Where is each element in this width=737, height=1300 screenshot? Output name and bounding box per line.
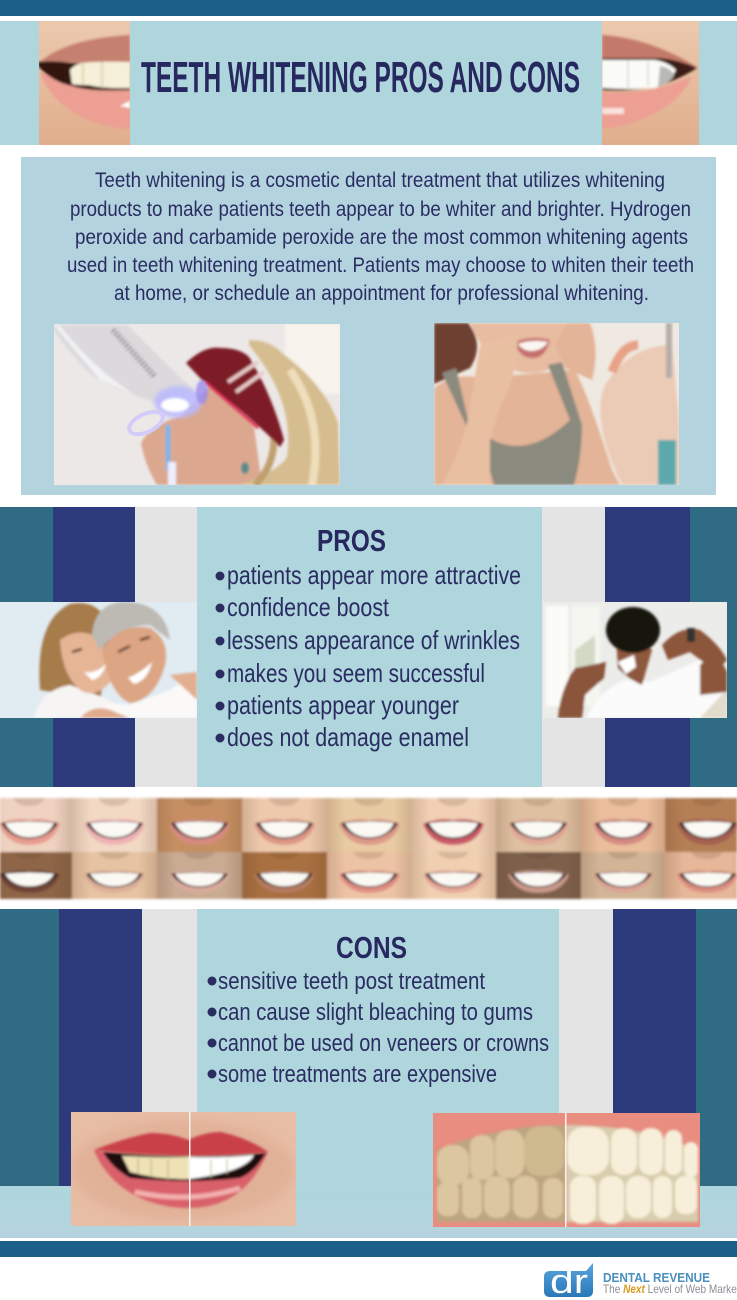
pros list: lessens appearance of wrinkles — [227, 625, 520, 655]
pros list — [216, 560, 521, 752]
cons list: some treatments are expensive — [218, 1061, 497, 1088]
pros heading: PROS — [317, 523, 386, 558]
pros list: makes you seem successful — [227, 658, 485, 688]
panel: cons — [0, 909, 737, 1238]
row 2 of smiles — [0, 852, 737, 899]
pros list: does not damage enamel — [227, 722, 469, 752]
intro text: Teeth whitening is a cosmetic dental treatment that utilizes whitening — [95, 169, 665, 192]
pros list: confidence boost — [227, 592, 390, 622]
cons heading: CONS — [336, 930, 407, 965]
cons list: sensitive teeth post treatment — [218, 968, 485, 995]
pros list: patients appear younger — [227, 690, 459, 720]
photo: left lips — [39, 21, 130, 145]
photo: man pointing at his smile — [544, 602, 727, 718]
top bar — [0, 0, 737, 16]
photo: smiling couple — [0, 602, 197, 718]
photo: right lips — [602, 21, 699, 145]
panel: pros — [0, 507, 737, 787]
cons list: cannot be used on veneers or crowns — [218, 1030, 549, 1057]
cons list — [208, 968, 549, 1088]
pros list: patients appear more attractive — [227, 560, 521, 590]
logo wordmark: DENTAL REVENUE — [603, 1271, 710, 1285]
photo: in-office light whitening — [54, 324, 340, 485]
logo icon: dr — [550, 1263, 588, 1300]
photo strip: collage of smiles — [0, 798, 737, 899]
header banner — [0, 21, 737, 145]
photo: teeth before and after — [433, 1113, 700, 1227]
row 1 of smiles — [0, 798, 737, 852]
logo icon — [544, 1263, 593, 1300]
intro text: at home, or schedule an appointment for professional whitening. — [114, 282, 649, 305]
logo: Dental Revenue — [544, 1263, 737, 1300]
photo: lips before and after — [71, 1112, 296, 1226]
intro text — [67, 169, 694, 305]
photo: woman applying whitening strips — [434, 323, 679, 485]
panel: introduction — [21, 157, 716, 495]
cons list: can cause slight bleaching to gums — [218, 999, 533, 1026]
bottom bar — [0, 1241, 737, 1257]
